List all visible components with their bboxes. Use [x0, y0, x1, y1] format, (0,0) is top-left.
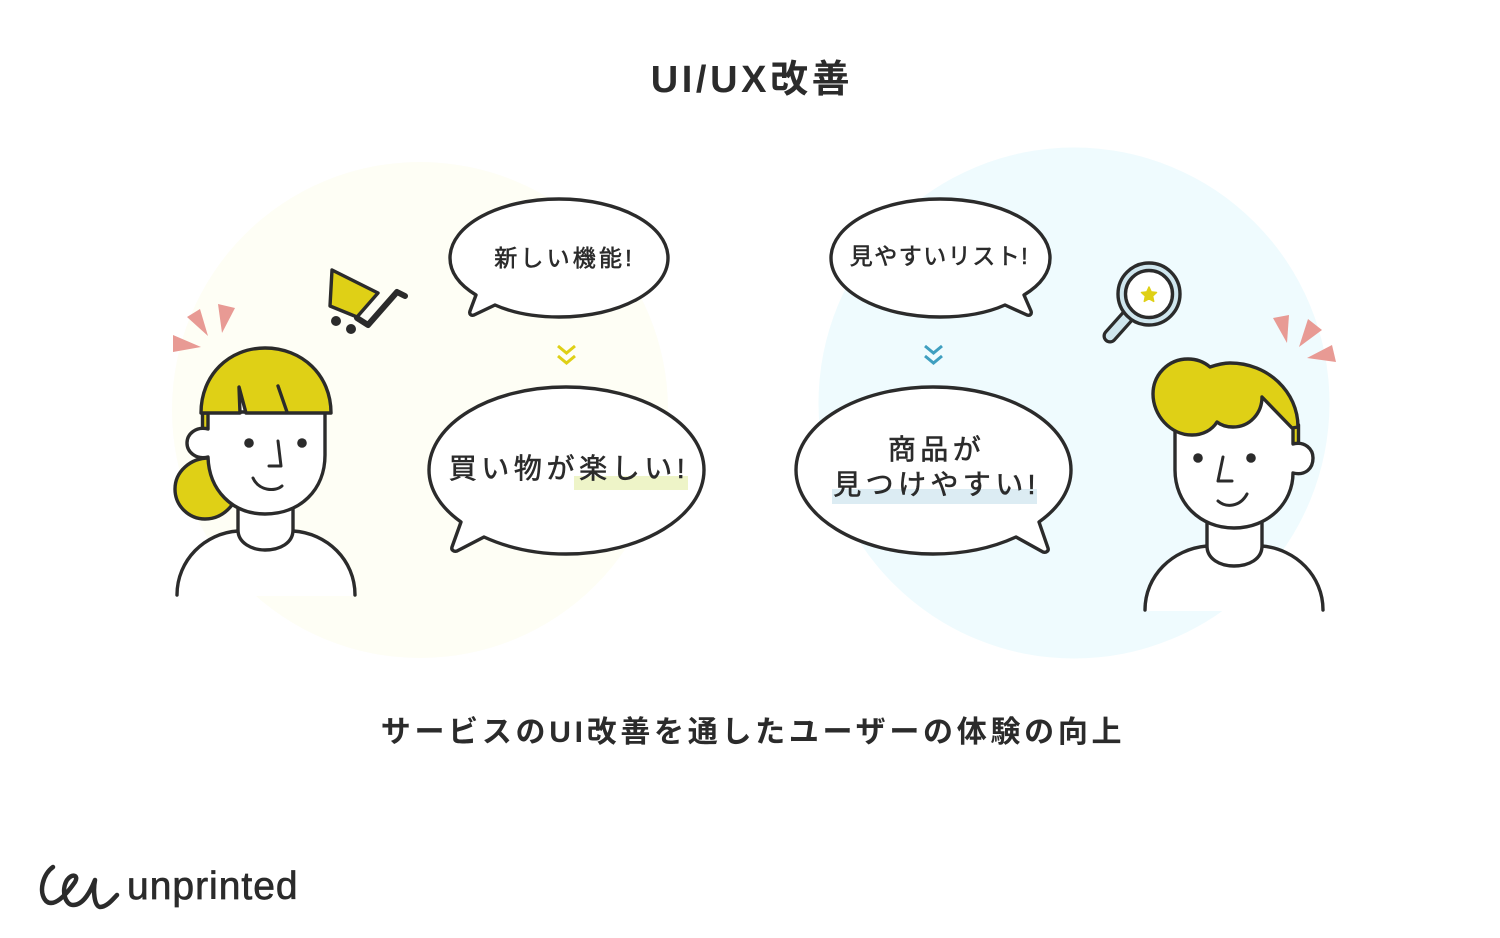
logo: unprinted	[42, 865, 299, 908]
background circle: right	[818, 148, 1330, 658]
hair	[201, 348, 331, 413]
face	[187, 412, 325, 514]
mouth	[253, 478, 282, 490]
background circle: left	[172, 162, 668, 658]
icon: magnifying glass	[1110, 263, 1180, 336]
eyes	[244, 438, 254, 448]
emphasis marks: right	[1273, 315, 1336, 362]
body	[1145, 546, 1323, 611]
speech bubble: easy to find products: 商品が	[888, 434, 985, 465]
hair	[1153, 359, 1298, 435]
speech bubble: shopping is fun	[429, 387, 704, 554]
person: man	[1145, 359, 1323, 611]
highlight	[832, 489, 1037, 504]
speech bubble: new feature	[450, 199, 668, 317]
logo wordmark: unprinted	[127, 865, 299, 908]
nose	[1218, 457, 1232, 481]
logo mark	[42, 867, 117, 907]
double chevron: blue	[925, 346, 942, 363]
speech bubble: easy to find products: 見つけやすい!	[833, 469, 1040, 500]
face	[1175, 385, 1313, 528]
highlight	[574, 476, 688, 490]
icon: shopping cart	[330, 270, 405, 334]
neck	[1207, 515, 1262, 566]
nose	[269, 441, 281, 466]
hair strip	[1292, 425, 1298, 445]
mouth	[1218, 494, 1247, 505]
title: UI/UX改善	[651, 59, 853, 101]
eyes	[1193, 453, 1203, 463]
double chevron: yellow	[558, 346, 575, 363]
caption: サービスのUI改善を通したユーザーの体験の向上	[381, 716, 1125, 749]
hair strip	[202, 413, 210, 430]
speech bubble: new feature: 新しい機能!	[494, 245, 635, 271]
star	[1142, 287, 1156, 301]
fringe line	[278, 386, 287, 412]
speech bubble: easy to find products	[796, 387, 1071, 554]
speech bubble: easy-to-see list	[831, 199, 1050, 317]
neck	[238, 500, 293, 550]
hair bun	[175, 458, 232, 519]
speech bubble: shopping is fun: 買い物が楽しい!	[449, 453, 689, 484]
emphasis marks: left	[173, 304, 235, 352]
body	[177, 531, 355, 596]
speech bubble: easy-to-see list: 見やすいリスト!	[850, 243, 1029, 269]
person: woman	[175, 348, 355, 596]
